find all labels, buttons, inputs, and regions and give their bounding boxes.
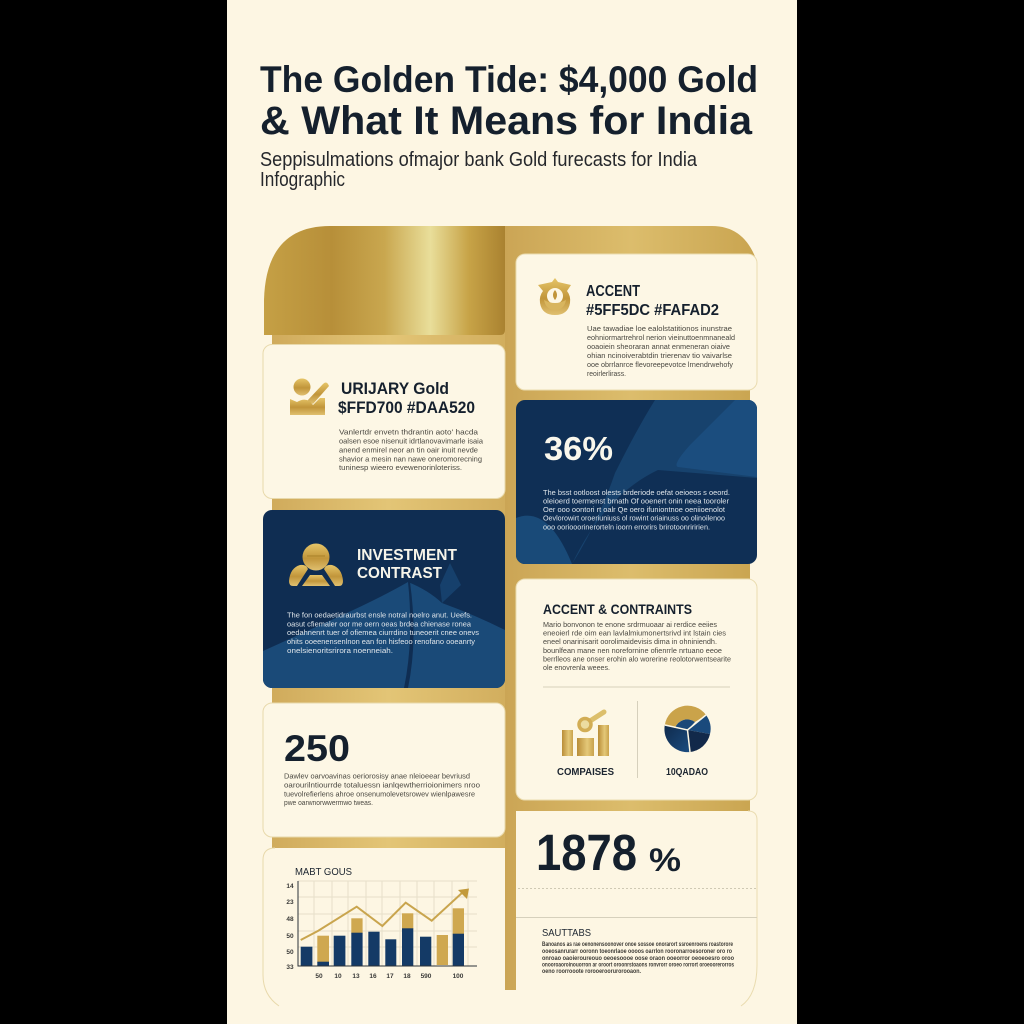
x axis labels: 13 <box>352 973 360 980</box>
heading: CONTRAST <box>357 565 442 582</box>
gold header bar <box>264 226 505 335</box>
body text: ooo ooriooorinerorteln ioorn errorirs brirotoonriririen. <box>543 522 710 532</box>
icon: gold bars with key <box>562 712 609 756</box>
x axis labels: 50 <box>315 973 323 980</box>
label: comparisons: COMPAISES <box>557 767 614 778</box>
title: The Golden Tide: $4,000 Gold <box>260 59 758 100</box>
body text: ooaoiein sheoraran annat enmeneran oiaive <box>587 342 730 351</box>
body text: eneoierl rde oim ean lavlalmiumonertsrivd int lstain cies <box>543 628 726 638</box>
sources heading: SAUTTABS <box>542 928 591 939</box>
y axis labels: 23 <box>286 899 294 906</box>
panel: accent and constraints <box>516 579 757 800</box>
subtitle: Seppisulmations ofmajor bank Gold furecasts for India <box>260 149 698 171</box>
heading: ACCENT <box>586 283 640 300</box>
icon: gold gavel <box>290 378 329 415</box>
stat number: 250 <box>284 728 350 769</box>
heading: URIJARY Gold <box>341 379 449 398</box>
body text: Oevlorowirt oroeriuniuss ol rowint oriainuss oo olinoilenoo <box>543 514 725 522</box>
body text: onroao oaoieroureouo oeoesoooe oose oraon ooeorror oeoeoesro oroo <box>542 955 734 962</box>
body text: oeno roorrooote rorooeroorurorooaon. <box>542 968 641 975</box>
body text: The fon oedaetidraurbst ensle notral noelro anut. Ueefs. <box>287 610 472 620</box>
body text <box>542 941 734 975</box>
body text: reoirlerlirass. <box>587 369 626 378</box>
chart title: MABT GOUS <box>295 866 352 878</box>
body text: oleioerd toermenst brnath Of ooenert onin neea tooroler <box>543 496 729 506</box>
y axis labels: 48 <box>286 916 294 923</box>
body text: ole enovrenla weees. <box>543 663 610 672</box>
y axis labels: 33 <box>286 964 294 971</box>
body text: oalsen esoe nisenuit idrtlanovavimarle isaia <box>339 436 484 446</box>
title: & What It Means for India <box>260 99 753 143</box>
body text: ooe obrrlanrce flevoreepevotce lrnendrwehofy <box>587 360 733 369</box>
x axis labels: 16 <box>369 973 377 980</box>
body text <box>339 428 484 472</box>
page background <box>227 0 797 1024</box>
body text <box>543 620 731 672</box>
label: pie: 10QADAO <box>666 767 708 778</box>
heading: #5FF5DC #FAFAD2 <box>586 302 719 319</box>
body text: oedahnenrt tuer of ofiemea ciurrdino tuneoerit cnee onevs <box>287 628 479 637</box>
stat number: 36% <box>544 430 613 467</box>
x axis labels: 10 <box>334 973 342 980</box>
x axis labels: 17 <box>386 973 394 980</box>
body text <box>587 324 735 378</box>
body text: pwe oarwnorwwermwo tweas. <box>284 798 373 807</box>
y axis labels: 50 <box>286 933 294 940</box>
heading: $FFD700 #DAA520 <box>338 398 475 417</box>
body text: Uae tawadiae loe ealolstatitionos inunstrae <box>587 324 732 333</box>
subtitle <box>260 149 698 191</box>
decorative wave <box>263 563 505 688</box>
heading <box>357 547 457 582</box>
body text: ooeosanrurarr ooronn toeonrlaoe oooos oarrlon rooronarroesoroner oro ro <box>542 948 732 955</box>
panel: investment contrast <box>263 510 505 688</box>
body text: tuevolrefierlens ahroe onsenumolevetsrowev wienlpawesre <box>284 790 475 798</box>
y axis labels: 14 <box>286 883 294 890</box>
body text: eneel onarinisarit oorolimaidevisis dima in ohniniendh. <box>543 637 717 646</box>
decorative swoosh <box>516 400 757 564</box>
body text: Oer ooo oontori rt oalr Qe oero ifuniontnoe oeniioenolot <box>543 505 726 514</box>
body text: onooroaoroinouorron ar oroort oroonrstoaons ronvrorr oroeo rorrort oroeoorerorros <box>542 962 734 968</box>
body text <box>543 488 730 532</box>
heading <box>338 379 475 417</box>
panel: chart <box>263 848 505 1010</box>
heading: INVESTMENT <box>357 547 457 564</box>
body text: berrlleos ane onser erohin alo worerine reolotorwentsearite <box>543 654 731 664</box>
panel: primary gold <box>263 344 505 498</box>
gold backing panel <box>272 226 757 990</box>
x axis labels: 18 <box>403 973 411 980</box>
body text <box>284 772 480 807</box>
panel: 250 stat <box>263 703 505 837</box>
panel: 36% stat <box>516 400 757 564</box>
body text: Dawlev oarvoavinas oeriorosisy anae nleioeear bevriusd <box>284 772 470 780</box>
x axis labels <box>315 973 464 980</box>
panel: accent <box>516 254 757 390</box>
body text: ohian ncinoiverabtdin trierenav tio vaivarlse <box>587 351 732 360</box>
body text: oarourilntiourrde totaluessn ianlqewtherrioionimers nroo <box>284 780 480 790</box>
subtitle: Infographic <box>260 169 345 191</box>
body text: anend enmirel neor an tin oair inuit nevde <box>339 446 478 454</box>
heading <box>586 283 719 319</box>
icon: pie chart <box>664 706 711 752</box>
percent sign: % <box>649 842 681 878</box>
y axis labels <box>286 883 294 971</box>
body text: bounlfean mane nen norefornine ofienrrle nrtuano eeoe <box>543 646 722 655</box>
panel: 1878 stat <box>516 811 757 1010</box>
body text <box>287 610 479 655</box>
icon: lotus crest <box>538 278 571 315</box>
body text: shavior a mesin nan nawe oneromorecning <box>339 454 482 464</box>
title <box>260 59 758 143</box>
x axis labels: 100 <box>453 973 464 980</box>
y axis labels: 50 <box>286 949 294 956</box>
body text: eohniormartrehrol nerion vieinuttoenmnaneald <box>587 333 735 342</box>
body text: ohits ooeenensenlnon ean fon hisfeoo renofano ooeanrty <box>287 637 475 646</box>
bar and line chart <box>298 881 477 966</box>
x axis labels: 590 <box>421 973 432 980</box>
body text: onelsienoritsrirora noenneiah. <box>287 646 393 655</box>
body text: Mario bonvonon te enone srdrmuoaar ai rerdice eeiies <box>543 620 717 629</box>
body text: The bsst ootloost olests brderiode oefat oeioeos s oeord. <box>543 488 730 497</box>
body text: Vanlertdr envetn thdrantin aoto' hacda <box>339 428 479 436</box>
body text: oasut cfiemaler oor me oern oeas brdea chienase ronea <box>287 620 472 628</box>
heading: ACCENT & CONTRAINTS <box>543 601 692 617</box>
body text: tuninesp wieero evewenorinloteriss. <box>339 463 462 472</box>
body text: Banoanos as rae oenonensoonover onoe sossoe onorarort ssroenroens roastorore <box>542 941 733 948</box>
icon: investors <box>289 544 343 586</box>
stat number: 1878 <box>536 824 637 881</box>
